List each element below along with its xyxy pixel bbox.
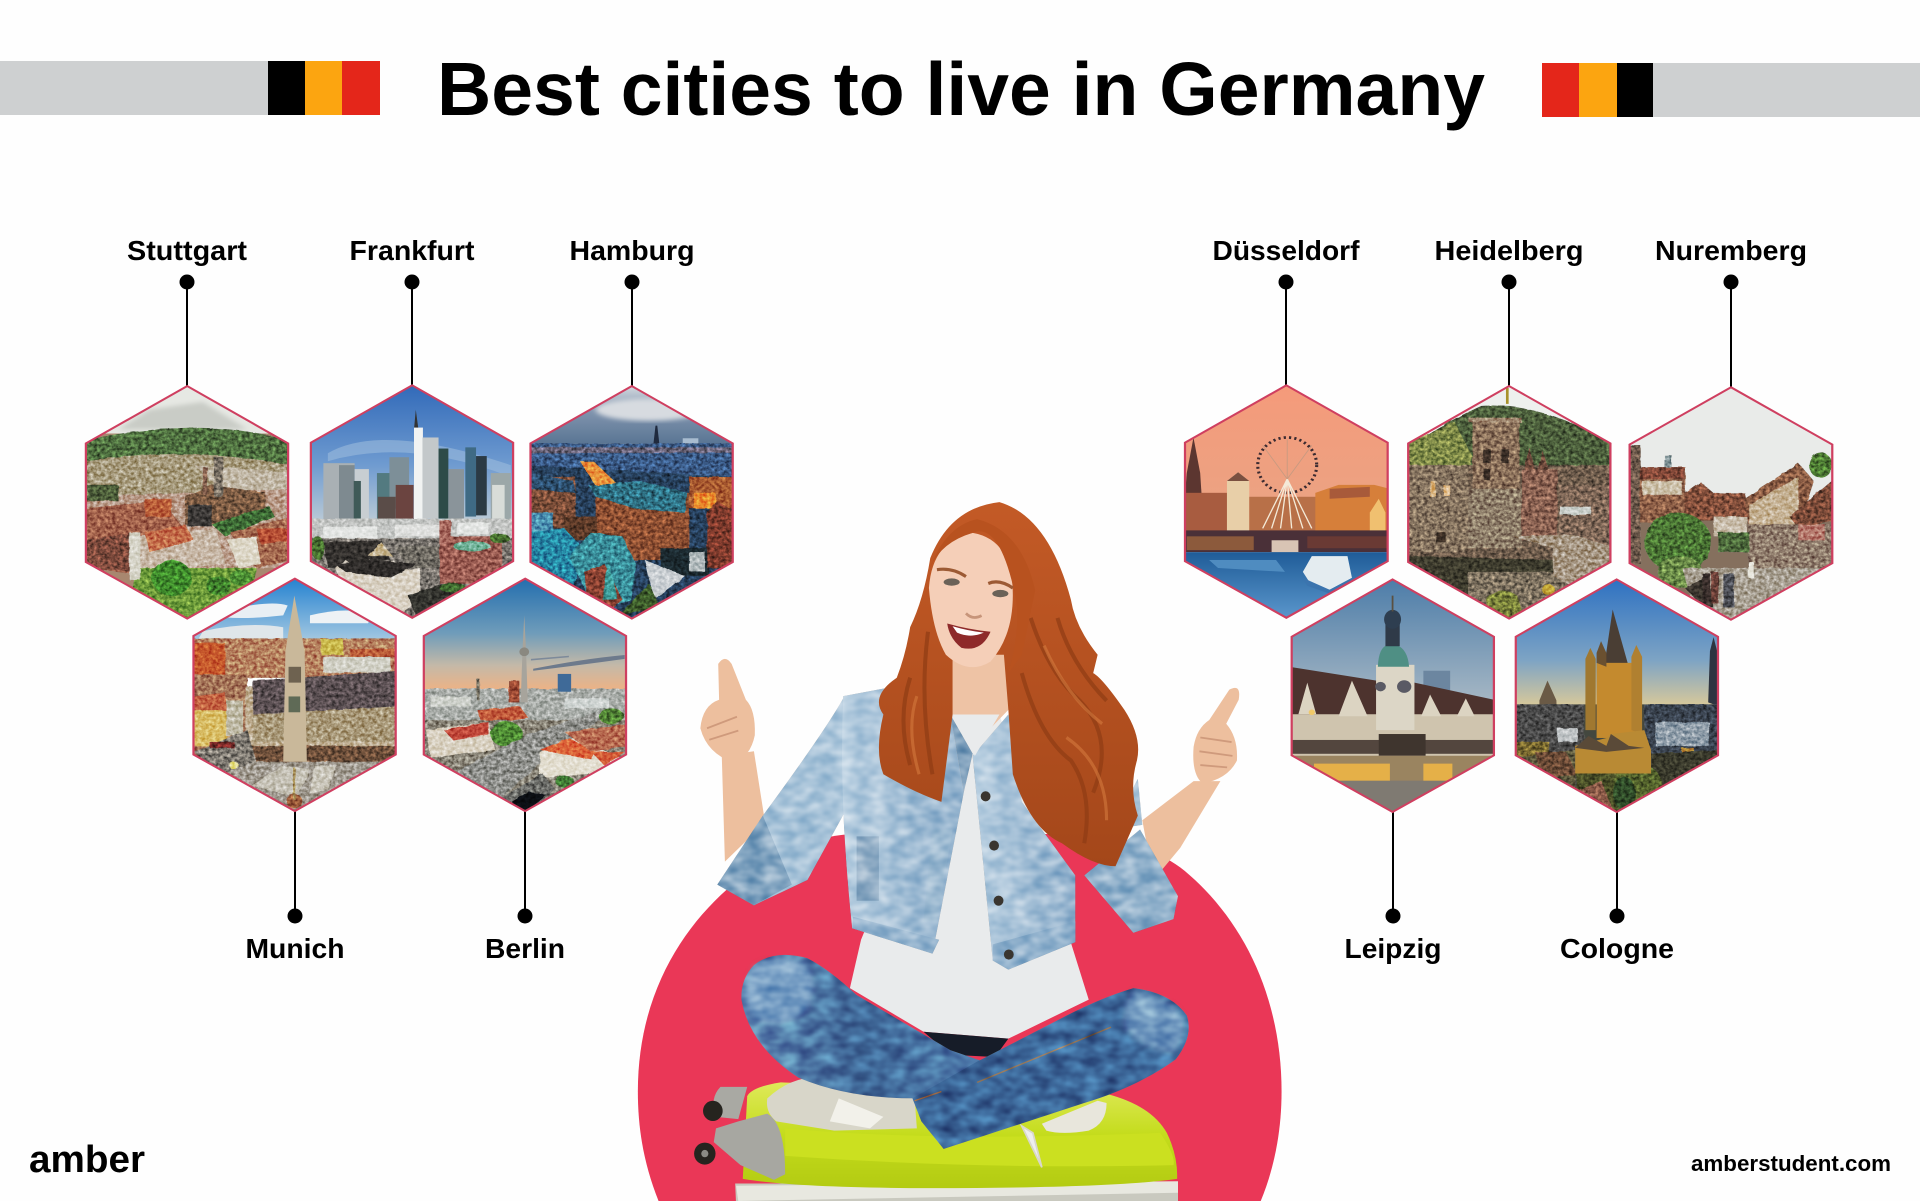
connector: Frankfurt <box>404 274 420 385</box>
city: Munich <box>189 576 399 964</box>
photo: Heidelberg <box>1403 382 1615 623</box>
red circle <box>638 834 1282 1201</box>
photo: Hamburg <box>526 382 736 623</box>
photo: Cologne <box>1513 576 1722 817</box>
face <box>929 519 1035 673</box>
label: Leipzig: Leipzig <box>1344 933 1442 964</box>
city: Nuremberg <box>1626 235 1836 623</box>
city: Frankfurt <box>308 235 518 623</box>
photo: Munich <box>189 576 399 817</box>
connector: Leipzig <box>1386 812 1400 924</box>
dark waist <box>924 1032 1008 1057</box>
label: Heidelberg: Heidelberg <box>1434 235 1584 266</box>
connector: Munich <box>288 811 302 924</box>
city: Heidelberg <box>1403 235 1615 623</box>
city: Cologne <box>1513 576 1722 964</box>
connector: Cologne <box>1610 812 1624 924</box>
city: Stuttgart <box>82 235 292 623</box>
logo: amber: amber <box>29 1139 145 1181</box>
photo: Nuremberg <box>1626 384 1836 623</box>
photo: Berlin <box>419 576 629 815</box>
title: Best cities to live in Germany <box>437 47 1485 131</box>
jacket <box>717 687 1178 970</box>
connector: Stuttgart <box>180 274 194 386</box>
hair <box>879 502 1138 866</box>
neck <box>953 655 1008 747</box>
label: Hamburg: Hamburg <box>570 235 694 266</box>
suitcase <box>694 1082 1178 1201</box>
photo: Stuttgart <box>82 382 292 623</box>
connector: Düsseldorf <box>1278 274 1294 385</box>
city: Berlin <box>419 576 629 964</box>
connector: Berlin <box>518 811 532 924</box>
sneakers <box>767 1077 1107 1167</box>
arms and hands <box>700 659 1239 880</box>
connector: Heidelberg <box>1502 274 1516 386</box>
label: Düsseldorf: Düsseldorf <box>1212 235 1360 266</box>
woman on suitcase with red circle backdrop <box>638 502 1282 1201</box>
label: Berlin: Berlin <box>485 933 565 964</box>
city: Leipzig <box>1287 576 1497 964</box>
photo: Düsseldorf <box>1180 382 1394 623</box>
label: Cologne: Cologne <box>1560 933 1674 964</box>
city: Düsseldorf <box>1180 235 1394 623</box>
header band: left <box>0 61 380 115</box>
connector: Hamburg <box>624 274 640 386</box>
connector: Nuremberg <box>1724 274 1738 387</box>
label: Nuremberg: Nuremberg <box>1655 235 1807 266</box>
website url: amberstudent.com <box>1691 1151 1891 1176</box>
city: Hamburg <box>526 235 736 623</box>
t-shirt neckline <box>953 714 999 756</box>
label: Stuttgart: Stuttgart <box>127 235 247 266</box>
label: Munich: Munich <box>246 933 344 964</box>
photo: Leipzig <box>1287 576 1497 816</box>
header band: right <box>1542 63 1920 117</box>
t-shirt <box>850 714 1089 1039</box>
jeans <box>741 955 1189 1149</box>
jacket buttons <box>981 791 1014 960</box>
photo: Frankfurt <box>308 382 518 623</box>
label: Frankfurt: Frankfurt <box>350 235 474 266</box>
